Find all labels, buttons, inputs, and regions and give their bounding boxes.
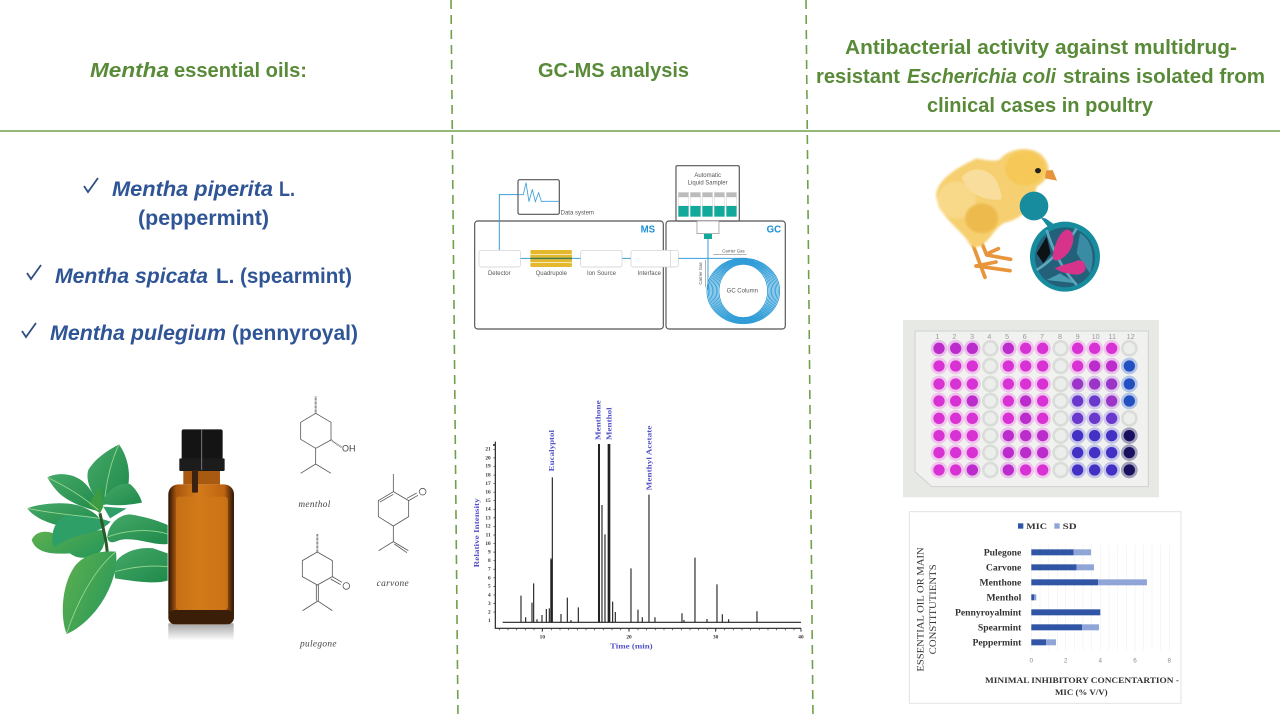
species list: [22, 178, 358, 345]
molecule: carvone: [377, 474, 426, 589]
y axis numbers: 1: [488, 618, 491, 624]
automatic liquid sampler: [676, 166, 739, 290]
carrier gas labels: Carrier Gas: [698, 262, 703, 285]
legend: [1018, 521, 1077, 531]
carrier gas labels: [698, 249, 747, 287]
column numbers: 8: [1058, 332, 1062, 341]
carrier gas labels: Carrier Gas: [722, 249, 745, 254]
grid lines: [1031, 544, 1169, 650]
x axis numbers: 10: [540, 635, 545, 641]
category labels: Pulegone: [984, 548, 1022, 559]
y axis numbers: 3: [488, 601, 491, 607]
item: Mentha pulegium: (pennyroyal): [232, 322, 358, 345]
x axis values: 4: [1099, 658, 1103, 665]
y axis numbers: 6: [488, 575, 491, 581]
peak labels: Menthyl Acetate: [644, 425, 653, 490]
heading: Mentha essential oils: essential oils:: [174, 60, 307, 82]
x axis values: 2: [1064, 658, 1068, 665]
ion source: [581, 250, 622, 277]
x axis title: [985, 676, 1179, 697]
GC column coil: [707, 258, 780, 324]
column numbers: 7: [1040, 332, 1044, 341]
x axis numbers: 40: [798, 635, 804, 641]
x axis title: MIC (% V/V): [1055, 688, 1108, 697]
quadrupole: [530, 250, 572, 277]
y axis numbers: 7: [488, 567, 491, 573]
molecule: menthol: menthol: [298, 500, 331, 510]
y axis numbers: 18: [485, 472, 491, 478]
y axis numbers: 17: [485, 481, 491, 487]
bars: [1031, 549, 1147, 645]
heading: antibacterial activity: strains isolated from: [1063, 66, 1265, 88]
item: Mentha pulegium: Mentha pulegium: [50, 322, 226, 345]
y axis numbers: [485, 447, 491, 624]
column numbers: 6: [1023, 332, 1027, 341]
data system: [499, 180, 594, 250]
y axis numbers: 4: [488, 592, 491, 598]
column numbers: 4: [987, 332, 991, 341]
peak labels: Eucalyptol: [547, 430, 556, 471]
peak labels: Menthone: [594, 399, 603, 440]
icon: amber bottle: [168, 429, 234, 641]
y axis title: ESSENTIAL OIL OR MAIN: [915, 547, 925, 672]
x axis title: MINIMAL INHIBITORY CONCENTARTION -: [985, 676, 1179, 685]
heading: antibacterial activity: clinical cases in poultry: [927, 95, 1154, 117]
MS box: MS: [641, 225, 656, 236]
item: Mentha piperita: Mentha piperita: [112, 178, 273, 201]
y axis numbers: 2: [488, 609, 491, 615]
y axis numbers: 15: [485, 498, 491, 504]
y axis numbers: 19: [485, 464, 491, 470]
y axis numbers: 14: [485, 507, 491, 513]
wells: [932, 341, 1136, 477]
item: Mentha piperita: [84, 178, 295, 230]
x axis values: 8: [1168, 658, 1172, 665]
y axis title: CONSTITUTIENTS: [928, 564, 938, 654]
vertical dashed divider: left: [451, 0, 458, 720]
heading: GC-MS analysis: GC-MS analysis: [538, 60, 689, 82]
MS box: [475, 221, 663, 329]
axis titles: Relative Intensity: [472, 498, 481, 567]
axes: [495, 442, 801, 628]
heading: antibacterial activity: resistant: [816, 66, 900, 88]
axis titles: Time (min): [610, 641, 653, 650]
molecular structures: [298, 396, 426, 650]
molecule: pulegone: [299, 534, 350, 650]
peaks: [503, 444, 801, 622]
molecule: menthol: OH: [342, 443, 355, 453]
column numbers: [935, 332, 1135, 341]
column numbers: 5: [1005, 332, 1009, 341]
plate background: [903, 320, 1159, 497]
illustration: chick with bacteria magnifier: [936, 149, 1100, 292]
icon: bacteria lens: [1020, 192, 1100, 292]
GC box: GC: [767, 225, 781, 236]
molecule: pulegone: pulegone: [299, 640, 337, 650]
column numbers: 3: [970, 332, 974, 341]
column numbers: 2: [952, 332, 956, 341]
interface: [631, 250, 678, 277]
diagram: GC-MS instrument schematic: [475, 166, 785, 329]
y axis numbers: 13: [485, 515, 491, 521]
detector: Detector: [488, 271, 511, 277]
heading: Mentha essential oils: [90, 60, 307, 82]
item: Mentha spicata: Mentha spicata: [55, 265, 208, 288]
vertical dashed divider: right: [806, 0, 813, 720]
GC box: [666, 221, 785, 329]
y axis numbers: 21: [485, 447, 491, 453]
category labels: Pennyroyalmint: [955, 608, 1022, 619]
icon: mint sprig: [27, 444, 168, 634]
item: Mentha spicata: L. (spearmint): [216, 265, 352, 288]
category labels: [955, 548, 1022, 649]
column numbers: 11: [1109, 332, 1116, 341]
axis ticks: [493, 445, 801, 632]
y axis numbers: 5: [488, 584, 491, 590]
column numbers: 9: [1076, 332, 1080, 341]
x axis numbers: 20: [626, 635, 632, 641]
y axis numbers: 12: [485, 524, 491, 530]
heading: Mentha essential oils: Mentha: [90, 60, 169, 82]
column numbers: 1: [935, 332, 939, 341]
category labels: Menthone: [979, 578, 1022, 589]
automatic liquid sampler: Automatic: [694, 173, 721, 179]
molecule: menthol: [298, 396, 355, 510]
flow line: [520, 257, 747, 260]
heading: antibacterial activity: Antibacterial activity against multidrug-: [845, 37, 1237, 59]
axis titles: [472, 498, 653, 650]
legend: SD: [1063, 521, 1077, 531]
category labels: Carvone: [986, 563, 1022, 574]
item: Mentha spicata: [27, 265, 352, 288]
icon: chick: [936, 149, 1057, 277]
y axis numbers: 9: [488, 549, 491, 555]
heading: antibacterial activity: [816, 37, 1265, 117]
horizontal header divider: [0, 130, 1280, 132]
interface: Interface: [638, 271, 662, 277]
photo: microplate assay: [903, 320, 1159, 497]
chart: gas chromatogram: [472, 399, 804, 650]
y axis numbers: 8: [488, 558, 491, 564]
x axis numbers: [540, 635, 804, 641]
category labels: Spearmint: [978, 623, 1022, 634]
y axis numbers: 10: [485, 541, 491, 547]
peak labels: Menthol: [605, 407, 614, 440]
x axis numbers: 30: [713, 635, 719, 641]
ion source: Ion Source: [587, 271, 617, 277]
quadrupole: Quadrupole: [536, 271, 568, 277]
molecule: carvone: carvone: [377, 579, 409, 589]
item: Mentha piperita: (peppermint): [138, 207, 269, 230]
legend: MIC: [1026, 521, 1047, 531]
detector: [479, 250, 520, 277]
illustration: mint leaves and amber bottle: [27, 429, 234, 641]
data system: Data system: [561, 211, 594, 217]
heading: antibacterial activity: Escherichia coli: [907, 66, 1056, 88]
item: Mentha pulegium: [22, 322, 358, 345]
x axis values: 0: [1030, 658, 1034, 665]
y axis numbers: 16: [485, 490, 491, 496]
y axis numbers: 20: [485, 455, 491, 461]
x axis values: [1030, 658, 1172, 665]
y axis title: [915, 547, 938, 672]
peak labels: [547, 399, 653, 490]
automatic liquid sampler: Liquid Sampler: [688, 180, 728, 186]
x axis values: 6: [1133, 658, 1137, 665]
GC column label: GC Column: [727, 289, 758, 295]
y axis numbers: 11: [486, 532, 491, 538]
column numbers: 10: [1092, 332, 1100, 341]
item: Mentha piperita: L.: [279, 178, 295, 201]
chart frame: [909, 512, 1181, 703]
category labels: Menthol: [986, 593, 1022, 604]
chart: minimal inhibitory concentration bars: [909, 512, 1181, 703]
category labels: Peppermint: [973, 638, 1022, 649]
column numbers: 12: [1127, 332, 1135, 341]
